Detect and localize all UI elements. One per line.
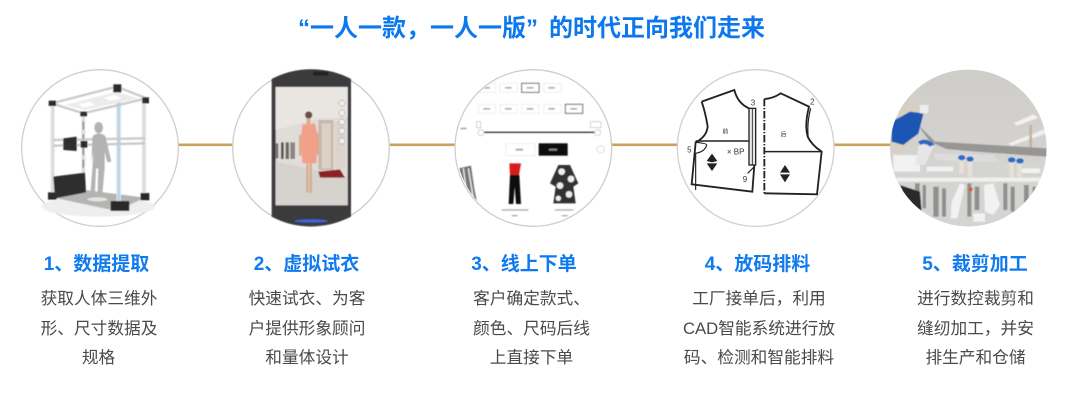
title: 的时代正向我们走来 bbox=[549, 15, 765, 42]
step 4 circle: sewing pattern bbox=[677, 70, 834, 226]
step 5 heading: 5、裁剪加工 bbox=[922, 253, 1028, 275]
step 5 description: 缝纫加工，并安 bbox=[917, 319, 1034, 338]
title: 一人一款，一人一版 bbox=[310, 15, 526, 42]
title: “ bbox=[298, 15, 310, 42]
step 4 circle: sewing pattern: 5 bbox=[687, 145, 692, 154]
step 3 description: 客户确定款式、 bbox=[473, 289, 590, 308]
step 1 description bbox=[41, 289, 158, 367]
step 4 description: 码、检测和智能排料 bbox=[684, 348, 834, 367]
step 3 heading: 3、线上下单 bbox=[471, 253, 577, 275]
step 1 description: 规格 bbox=[82, 348, 115, 367]
step 2 description: 和量体设计 bbox=[265, 348, 349, 367]
step 1 description: 形、尺寸数据及 bbox=[41, 319, 158, 338]
step 3 description: 颜色、尺码后线 bbox=[473, 319, 590, 338]
step 4 circle: sewing pattern: 3 bbox=[751, 99, 756, 108]
step 4 description bbox=[683, 289, 835, 367]
step 5 description: 进行数控裁剪和 bbox=[917, 289, 1034, 308]
step 3 description: 上直接下单 bbox=[490, 348, 573, 367]
step 4 circle: sewing pattern: 9 bbox=[743, 175, 748, 184]
step 2 circle: virtual fitting phone bbox=[233, 69, 389, 226]
step 2 description: 户提供形象顾问 bbox=[249, 319, 365, 338]
step 4 heading: 4、放码排料 bbox=[705, 253, 810, 275]
step 5 description: 排生产和仓储 bbox=[925, 348, 1026, 367]
step 4 description: 工厂接单后，利用 bbox=[692, 289, 826, 308]
step 4 circle: sewing pattern: 前 bbox=[722, 127, 728, 135]
step 1 description: 获取人体三维外 bbox=[41, 289, 158, 308]
step 3 circle: order interface bbox=[455, 70, 612, 226]
step 2 heading: 2、虚拟试衣 bbox=[254, 252, 359, 275]
step 3 description bbox=[473, 289, 590, 367]
step 2 description: 快速试衣、为客 bbox=[249, 289, 366, 308]
step 5 circle: factory photo bbox=[890, 70, 1047, 226]
step 1 heading: 1、数据提取 bbox=[44, 253, 149, 275]
step 4 description: CAD智能系统进行放 bbox=[683, 319, 835, 338]
step 4 circle: sewing pattern: 后 bbox=[781, 131, 787, 139]
step 5 description bbox=[917, 289, 1034, 367]
title: ” bbox=[526, 15, 538, 42]
step 1 circle: body scanner bbox=[22, 70, 178, 226]
step 2 description bbox=[249, 289, 366, 367]
step 4 circle: sewing pattern: × BP bbox=[727, 147, 744, 156]
connector lines bbox=[178, 144, 891, 146]
step 4 circle: sewing pattern: 2 bbox=[810, 97, 815, 106]
